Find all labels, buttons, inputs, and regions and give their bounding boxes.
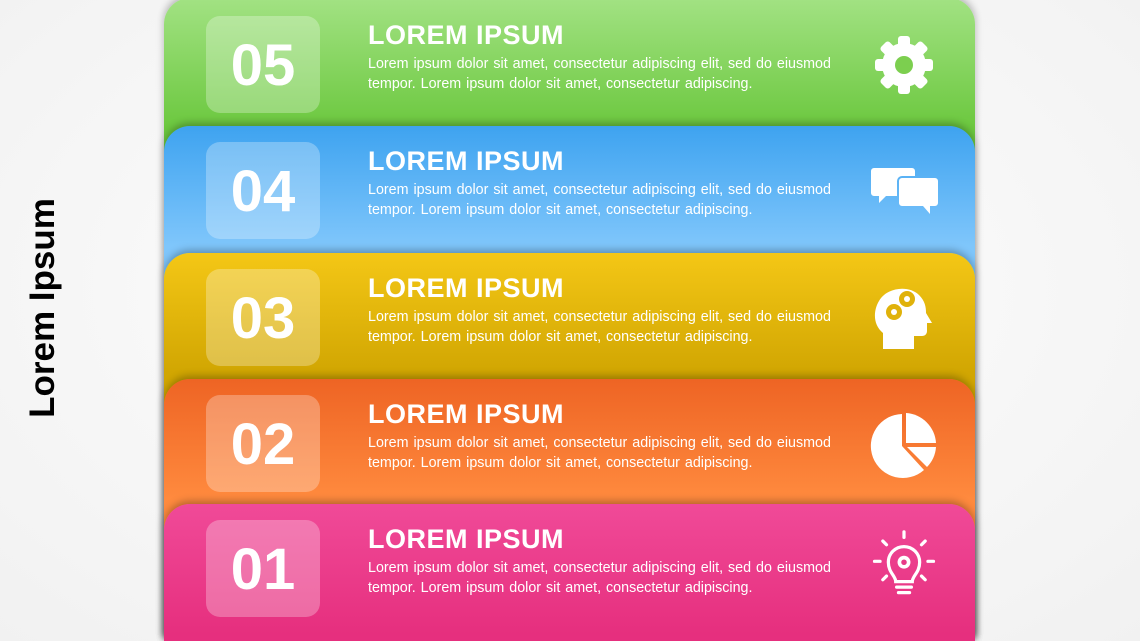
heading 03: LOREM IPSUM — [368, 273, 564, 303]
heading 05: LOREM IPSUM — [368, 20, 564, 50]
text 01: Lorem ipsum dolor sit amet, consectetur adipiscing elit, sed do eiusmod tempor. Lorem ipsum dolor sit amet, consectetur adipiscing. — [368, 560, 831, 596]
panel: 04 — [164, 126, 975, 641]
text 02: Lorem ipsum dolor sit amet, consectetur adipiscing elit, sed do eiusmod tempor. Lorem ipsum dolor sit amet, consectetur adipiscing. — [368, 435, 831, 471]
number 04 — [206, 142, 320, 239]
heading 01: LOREM IPSUM — [368, 524, 564, 554]
number 03: 03 — [231, 286, 295, 351]
side title: Lorem Ipsum — [23, 198, 62, 418]
number 01 — [206, 520, 320, 617]
number 01: 01 — [231, 537, 295, 602]
panel: 05 — [164, 0, 975, 641]
icon: lightbulb — [872, 530, 936, 594]
icon: gear — [875, 36, 933, 94]
number 05: 05 — [231, 33, 295, 98]
icon: chat — [871, 168, 938, 214]
number 04: 04 — [231, 159, 295, 224]
number 05 — [206, 16, 320, 113]
text 03: Lorem ipsum dolor sit amet, consectetur adipiscing elit, sed do eiusmod tempor. Lorem ipsum dolor sit amet, consectetur adipiscing. — [368, 309, 831, 345]
panel: 02 — [164, 379, 975, 641]
panel: 01 — [164, 504, 975, 641]
icon: pie chart — [870, 413, 936, 478]
number 02 — [206, 395, 320, 492]
text 05: Lorem ipsum dolor sit amet, consectetur adipiscing elit, sed do eiusmod tempor. Lorem ipsum dolor sit amet, consectetur adipiscing. — [368, 56, 831, 92]
text 04: Lorem ipsum dolor sit amet, consectetur adipiscing elit, sed do eiusmod tempor. Lorem ipsum dolor sit amet, consectetur adipiscing. — [368, 182, 831, 218]
panel: 03 — [164, 253, 975, 641]
heading 02: LOREM IPSUM — [368, 399, 564, 429]
number 02: 02 — [231, 412, 295, 477]
icon: head gears — [874, 288, 932, 349]
heading 04: LOREM IPSUM — [368, 146, 564, 176]
number 03 — [206, 269, 320, 366]
